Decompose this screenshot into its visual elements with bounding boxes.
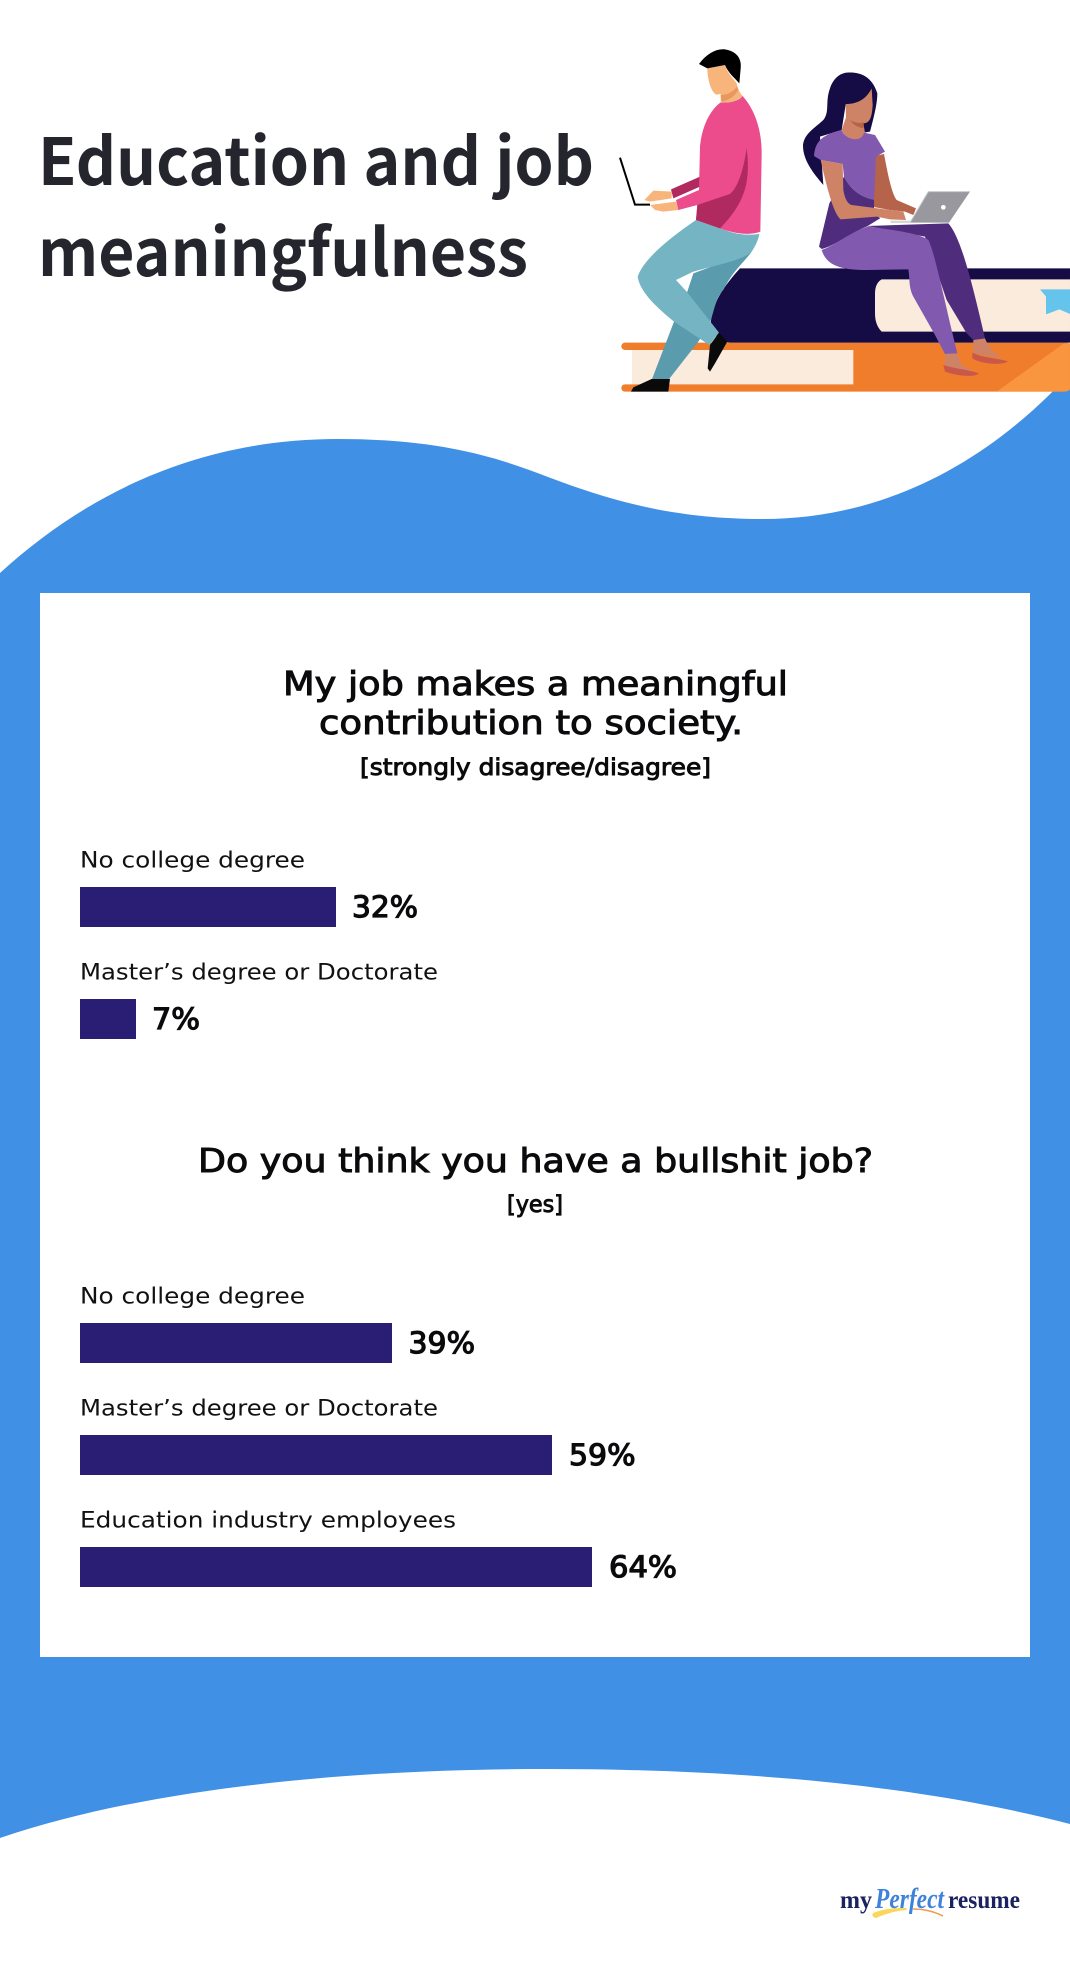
woman [803, 73, 1008, 376]
orange book [621, 343, 1070, 392]
title: Education and job [38, 110, 594, 204]
chart 2 row: education industry employees: 64% [609, 1550, 677, 1584]
logo: myPerfectResume: my [840, 1887, 872, 1914]
blue wave background [0, 360, 1070, 1838]
chart 1 heading: My job makes a meaningful [283, 664, 788, 703]
chart 2 row: no college degree: 39% [408, 1326, 475, 1360]
illustration: two people sitting on books [620, 49, 1070, 392]
panel: chart card [40, 593, 1030, 1657]
chart 1 row: no college degree: No college degree [80, 848, 305, 874]
chart 2 heading: [yes] [507, 1192, 563, 1218]
title: meaningfulness [38, 201, 528, 295]
chart 1 heading [283, 664, 788, 781]
chart 1 row: master's degree or doctorate: 7% [152, 1002, 200, 1036]
logo: myPerfectResume: Perfect [874, 1884, 945, 1915]
man [620, 49, 762, 392]
chart 1 heading: contribution to society. [319, 703, 743, 742]
chart 1 row: master's degree or doctorate: Master’s degree or Doctorate [80, 960, 438, 986]
chart 2 row: education industry employees [80, 1508, 677, 1587]
title [38, 110, 594, 295]
logo: myPerfectResume: resume [948, 1887, 1020, 1914]
chart 2 row: master's degree or doctorate [80, 1396, 636, 1475]
navy book [711, 268, 1070, 343]
chart 1 row: no college degree [80, 848, 418, 927]
chart 2 heading: Do you think you have a bullshit job? [198, 1141, 873, 1180]
chart 1 row: no college degree: 32% [352, 890, 418, 924]
logo: myPerfectResume [840, 1884, 1020, 1918]
chart 2 row: education industry employees: Education industry employees [80, 1508, 456, 1534]
chart 1 heading: [strongly disagree/disagree] [360, 755, 711, 781]
chart 2 row: master's degree or doctorate: 59% [569, 1438, 636, 1472]
chart 2 row: master's degree or doctorate: Master’s degree or Doctorate [80, 1396, 438, 1422]
chart 2 heading [198, 1141, 873, 1218]
chart 2 row: no college degree [80, 1284, 475, 1363]
chart 2 row: no college degree: No college degree [80, 1284, 305, 1310]
chart 1 row: master's degree or doctorate [80, 960, 438, 1039]
